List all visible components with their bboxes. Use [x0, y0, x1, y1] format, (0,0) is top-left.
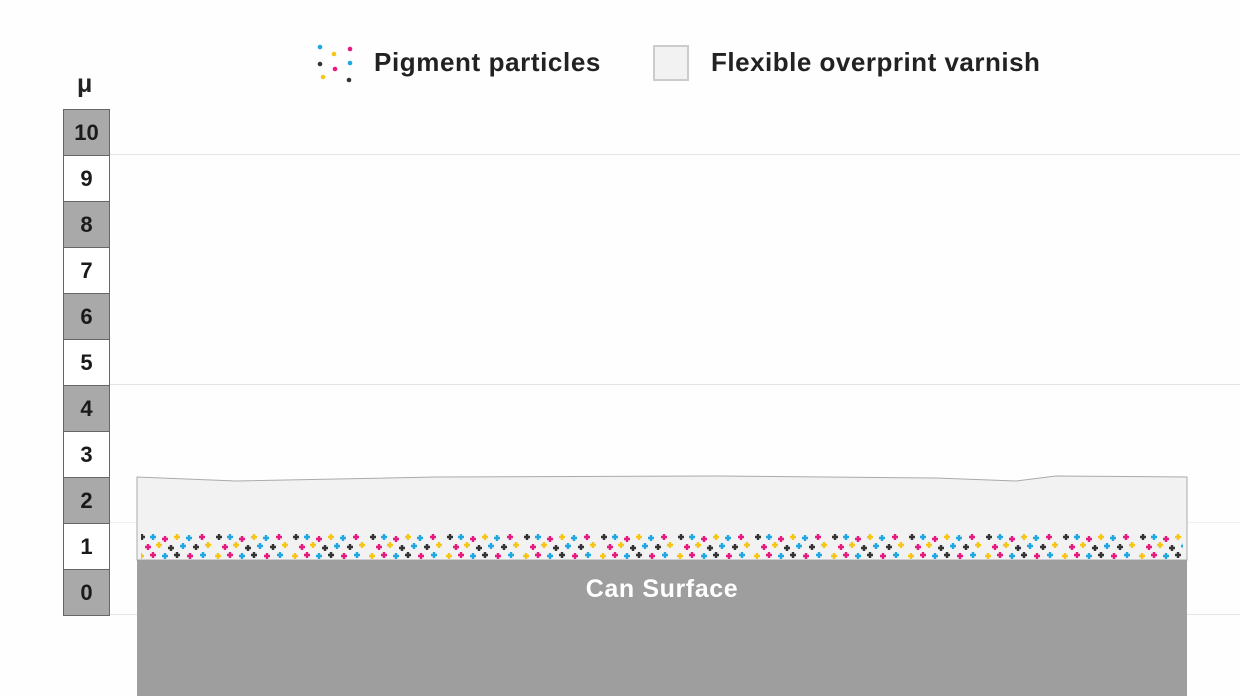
scale column: 5	[80, 350, 93, 375]
legend	[318, 44, 1040, 82]
scale column: 9	[80, 166, 93, 191]
scale column: 0	[80, 580, 93, 605]
scale unit: μ	[77, 70, 92, 98]
scale column: 8	[80, 212, 93, 237]
legend label: varnish: Flexible overprint varnish	[711, 47, 1040, 77]
scale column: 3	[80, 442, 93, 467]
scale column: 6	[80, 304, 93, 329]
scale column: 4	[80, 396, 93, 421]
scale column: 2	[80, 488, 93, 513]
scale column: 10	[74, 120, 99, 145]
scale column	[63, 109, 110, 616]
scale column: 7	[80, 258, 93, 283]
scale column: 1	[80, 534, 93, 559]
varnish layer	[136, 476, 1188, 560]
legend label: pigment: Pigment particles	[374, 47, 601, 77]
can surface: Can Surface	[586, 575, 738, 603]
icon: pigment particles	[318, 44, 352, 82]
icon: varnish swatch	[653, 45, 689, 81]
can surface	[137, 560, 1187, 696]
